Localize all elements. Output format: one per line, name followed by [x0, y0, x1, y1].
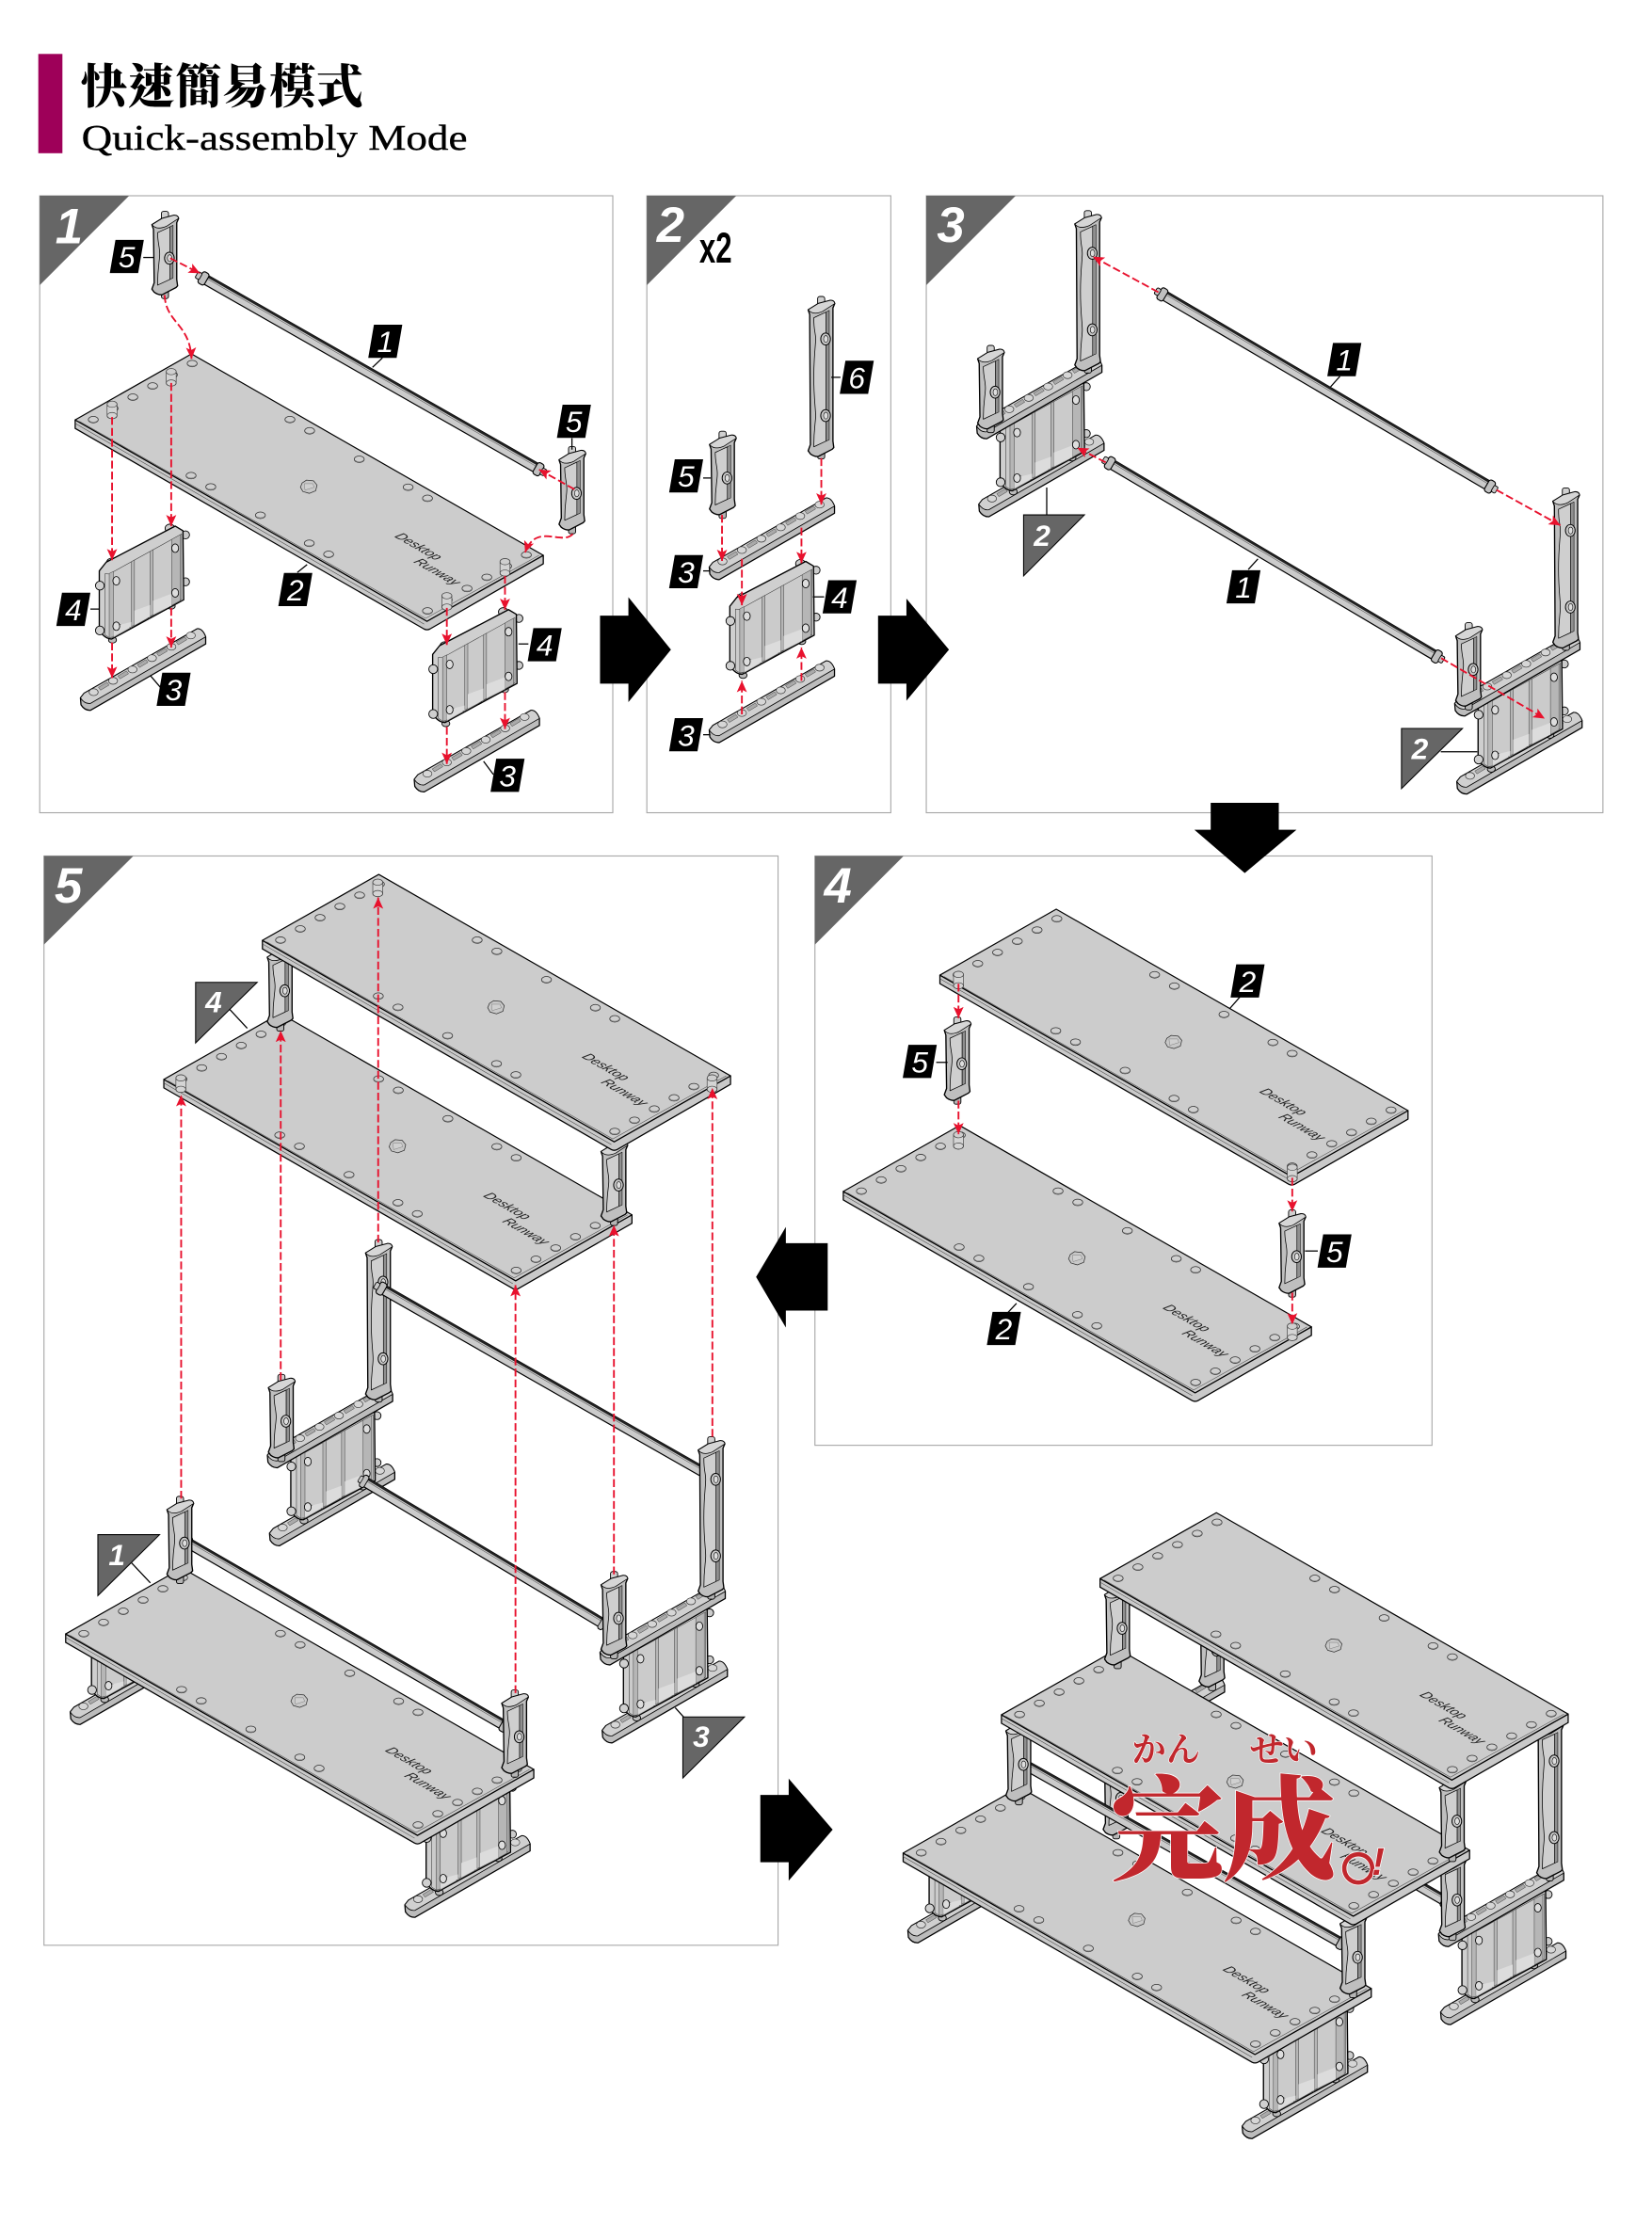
- lower tier rod: [177, 1533, 514, 1735]
- label 5 right: [1305, 1235, 1352, 1269]
- label 4: [812, 581, 857, 615]
- top plate: Desktop: [1417, 1689, 1471, 1720]
- arrow: panel 3 to 4: [1195, 803, 1296, 873]
- assembly arrows: [181, 897, 713, 1693]
- front-right leg assembly: [600, 1437, 728, 1743]
- assembly arrows: [958, 984, 1292, 1324]
- label 5 right: [557, 405, 591, 450]
- step badge 4: 4: [824, 858, 852, 914]
- furigana sei: せい: [1250, 1732, 1318, 1769]
- label 4: [56, 593, 99, 627]
- post 5 left: [152, 212, 179, 298]
- arrow: panel 2 to 3: [878, 599, 949, 700]
- lower rod 1: [1100, 454, 1447, 666]
- left leg assembly: [977, 211, 1104, 517]
- callout triangle 2 right: 2: [1411, 731, 1429, 765]
- label 4: 4: [65, 593, 82, 627]
- assembly arrows: [722, 458, 822, 714]
- posts between plates: [267, 944, 628, 1225]
- callout triangle 2 left: [1023, 488, 1084, 576]
- frame 4 right: [429, 608, 522, 727]
- label 2 lower: [986, 1304, 1021, 1346]
- small ring mark: 。: [1338, 1745, 1452, 1908]
- completion heading: [1111, 1732, 1452, 1908]
- label 2 upper: [1230, 965, 1264, 1008]
- label 3 right: [484, 759, 524, 792]
- panel 2: leg assembly x2: [647, 196, 890, 813]
- post 5 right: [559, 446, 585, 534]
- lower plate: Desktop: [1219, 1964, 1275, 1995]
- plate 2: Runway: [410, 556, 466, 587]
- middle plate: Desktop: [1318, 1826, 1373, 1857]
- lower tier back leg: [907, 1802, 1034, 1943]
- step badge 2: [647, 196, 736, 285]
- step badge 4: [815, 856, 904, 945]
- lower beam 3: [709, 661, 835, 743]
- panel 2 border: [647, 196, 890, 813]
- panel 5 border: [44, 856, 778, 1945]
- subtitle: Quick-assembly Mode: [82, 119, 468, 158]
- furigana kan: かん: [1132, 1732, 1200, 1769]
- middle plate: [1002, 1649, 1469, 1925]
- lower tier plate: [66, 1568, 534, 1844]
- upper plate 2: [940, 909, 1408, 1185]
- label 5 right: 5: [1326, 1235, 1343, 1269]
- middle plate: Desktop: [480, 1190, 536, 1222]
- label 3: 3: [166, 673, 183, 707]
- callout triangle 4: [196, 983, 257, 1043]
- part labels: [56, 240, 591, 792]
- callout triangle 3: 3: [693, 1720, 710, 1753]
- posts on lower plate: [1006, 1718, 1367, 1998]
- post 5 right: [1279, 1209, 1306, 1297]
- lower tier front leg: [1243, 1998, 1368, 2138]
- frame 4 left: [95, 524, 189, 643]
- label 3: [151, 673, 191, 707]
- lower plate: [903, 1787, 1371, 2063]
- right leg assembly: [1438, 1719, 1566, 2024]
- callout triangle 4: 4: [204, 984, 222, 1018]
- panel 3 border: [926, 196, 1603, 813]
- label 3: [669, 555, 711, 589]
- arrow: panel 1 to 2: [600, 597, 671, 702]
- label 5: [110, 240, 153, 274]
- callout triangle 2 right: [1402, 728, 1477, 789]
- middle plate: [164, 1014, 632, 1289]
- label 5 left: [903, 1045, 948, 1079]
- step badge 3: 3: [937, 198, 965, 253]
- label 2: 2: [286, 573, 304, 607]
- step badge 5: 5: [55, 858, 83, 914]
- label 2: [279, 565, 313, 607]
- dowels on plate: [107, 369, 510, 610]
- lower plate 2: [843, 1126, 1311, 1401]
- label 1 lower: 1: [1235, 570, 1252, 604]
- label 1 upper: [1327, 343, 1361, 387]
- rod 1: [194, 269, 549, 479]
- middle plate: Runway: [499, 1216, 554, 1247]
- assembly arrows: [112, 258, 574, 764]
- panel 4 border: [815, 856, 1432, 1446]
- label 3 lower: 3: [678, 718, 695, 752]
- step badge 1: [40, 196, 129, 285]
- plate 2: Desktop: [392, 531, 447, 562]
- lower plate: Runway: [1239, 1990, 1293, 2021]
- label 1: 1: [377, 325, 393, 359]
- title colour bar: [39, 54, 62, 153]
- long post 6: [809, 296, 835, 459]
- assembly arrows: [1077, 257, 1561, 718]
- rod between lower and middle plates: [1016, 1756, 1351, 1952]
- lower plate 2: Desktop: [1160, 1303, 1215, 1334]
- right leg assembly: [1454, 488, 1582, 794]
- rear upper rod: [372, 1279, 716, 1483]
- kanji kansei: 完成: [1111, 1771, 1337, 1896]
- label 3 right: 3: [499, 759, 516, 792]
- label 4 right: 4: [537, 629, 553, 663]
- upper rod 1: [1152, 285, 1500, 496]
- plate 2: [75, 354, 543, 630]
- top plate: Runway: [1435, 1715, 1491, 1747]
- back leg under lower tier: [71, 1584, 196, 1724]
- dowels: [954, 971, 1297, 1340]
- front leg under lower tier: [405, 1777, 530, 1917]
- arrow: panel 4 to 5: [756, 1227, 827, 1328]
- hidden rear parts: [1099, 1604, 1455, 1911]
- callout triangle 1: [98, 1535, 160, 1595]
- lower tier plate: Desktop: [382, 1745, 437, 1776]
- panel 3: connect legs with rods: [926, 196, 1603, 813]
- callout triangle 2 left: 2: [1033, 519, 1051, 552]
- callout triangle 3: [675, 1707, 745, 1778]
- top plate: [263, 874, 730, 1150]
- frame 4: [726, 559, 820, 679]
- label 4 right: [519, 628, 562, 663]
- upper plate 2: Desktop: [1257, 1086, 1311, 1117]
- multiplier x2: x2: [699, 224, 732, 272]
- upper plate 2: Runway: [1275, 1112, 1330, 1143]
- exclamation mark: !: [1371, 1840, 1385, 1883]
- label 5: [669, 459, 711, 493]
- top plate: Runway: [598, 1077, 653, 1108]
- label 3 lower: [669, 718, 711, 752]
- panel 4: joining the plates: [815, 856, 1432, 1446]
- top plate: Desktop: [579, 1051, 634, 1082]
- panel 1: exploded view of one plate: [40, 196, 613, 813]
- label 5 left: 5: [911, 1045, 928, 1079]
- arrow: panel 5 to completed stand: [761, 1779, 833, 1880]
- label 4: 4: [831, 581, 848, 615]
- lower tier posts: [167, 1496, 528, 1777]
- label 1: [368, 325, 402, 367]
- post 5 left: [944, 1017, 971, 1104]
- part labels: [669, 360, 874, 752]
- label 6: [831, 360, 874, 395]
- upper beam 3: [709, 498, 835, 580]
- label 2 upper: 2: [1239, 965, 1257, 999]
- step badge 3: [926, 196, 1016, 285]
- label 3: 3: [678, 555, 695, 589]
- short post 5: [710, 431, 736, 519]
- dowels: [176, 879, 717, 1093]
- label 5 right: 5: [566, 405, 583, 439]
- label 5: 5: [119, 240, 136, 274]
- label 6: 6: [848, 361, 865, 395]
- completed three-tier stand: [903, 1512, 1568, 2138]
- beam 3 right: [414, 711, 539, 792]
- lower tier plate: Runway: [401, 1770, 457, 1801]
- step badge 2: 2: [656, 198, 684, 253]
- beam 3 left: [80, 629, 206, 711]
- panel 1 border: [40, 196, 613, 813]
- top plate: [1100, 1512, 1568, 1788]
- posts on middle plate: [1104, 1581, 1466, 1862]
- label 2 lower: 2: [995, 1312, 1013, 1346]
- rear leg assembly: [267, 1240, 394, 1545]
- middle plate: Runway: [1337, 1851, 1392, 1882]
- rear lower rod: [356, 1473, 611, 1632]
- callout triangle 1: 1: [108, 1538, 125, 1572]
- step badge 5: [44, 856, 134, 945]
- label 5: 5: [678, 459, 695, 493]
- panel 5: stacking all sections: [44, 856, 778, 1945]
- label 1 lower: [1227, 559, 1260, 604]
- title: 快速簡易模式: [81, 61, 363, 113]
- lower plate 2: Runway: [1179, 1328, 1234, 1359]
- step badge 1: 1: [56, 199, 83, 254]
- label 1 upper: 1: [1336, 344, 1353, 377]
